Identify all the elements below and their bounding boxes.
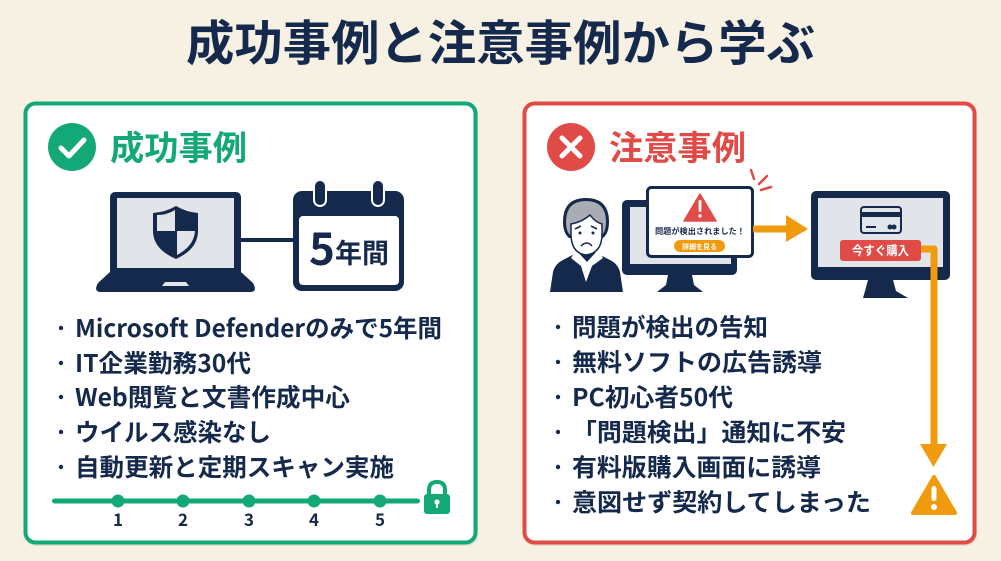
icon: calendar five years: 年間 [335,232,389,271]
timeline: five years [52,494,420,531]
button: buy now: 今すぐ購入 [852,240,909,259]
list: caution details: 問題が検出の告知 [572,309,768,344]
icon: lock [424,482,450,514]
list: caution details: 無料ソフトの広告誘導 [572,344,822,379]
title: 成功事例と注意事例から学ぶ [186,4,815,74]
list: caution details: 有料版購入画面に誘導 [572,449,821,484]
timeline: five years: 2 [178,506,188,531]
alert sparks [751,170,771,190]
icon: orange warning triangle [913,477,955,513]
panel: caution cases [524,104,977,546]
list: success details: Microsoft Defenderのみで5年間 [75,310,442,345]
connector line [241,238,295,242]
list: caution details: 「問題検出」通知に不安 [572,414,846,449]
icon: purchase monitor [811,191,950,298]
list: caution details: PC初心者50代 [572,379,733,414]
icon: red warning triangle [684,194,716,221]
icon: back monitor [622,200,737,292]
heading: caution cases: 注意事例 [609,121,746,170]
heading: success cases: 成功事例 [110,121,247,170]
icon: check circle [48,123,96,171]
popup: problem detected: 問題が検出されました！ [655,225,745,237]
timeline: five years: 1 [113,506,123,531]
icon: calendar five years: 5 [309,214,335,278]
list: success details [59,310,442,484]
list: success details: ウイルス感染なし [75,414,271,449]
icon: cross circle [547,123,595,171]
list: success details: 自動更新と定期スキャン実施 [75,449,394,484]
icon: laptop with shield [96,192,255,292]
icon: calendar five years [293,180,404,291]
list: caution details [556,309,871,519]
icon: worried person [550,198,623,292]
icon: credit card [861,207,901,233]
popup: problem detected [648,188,752,256]
list: success details: IT企業勤務30代 [75,345,251,380]
arrow: popup to purchase screen [753,215,808,242]
timeline: five years: 5 [375,506,385,531]
list: caution details: 意図せず契約してしまった [572,484,871,519]
arrow: purchase to warning [921,249,934,445]
popup: problem detected: 詳細を見る [682,242,717,252]
list: success details: Web閲覧と文書作成中心 [75,379,350,414]
timeline: five years: 4 [309,506,319,531]
panel: success cases [25,104,478,546]
timeline: five years: 3 [244,506,254,531]
